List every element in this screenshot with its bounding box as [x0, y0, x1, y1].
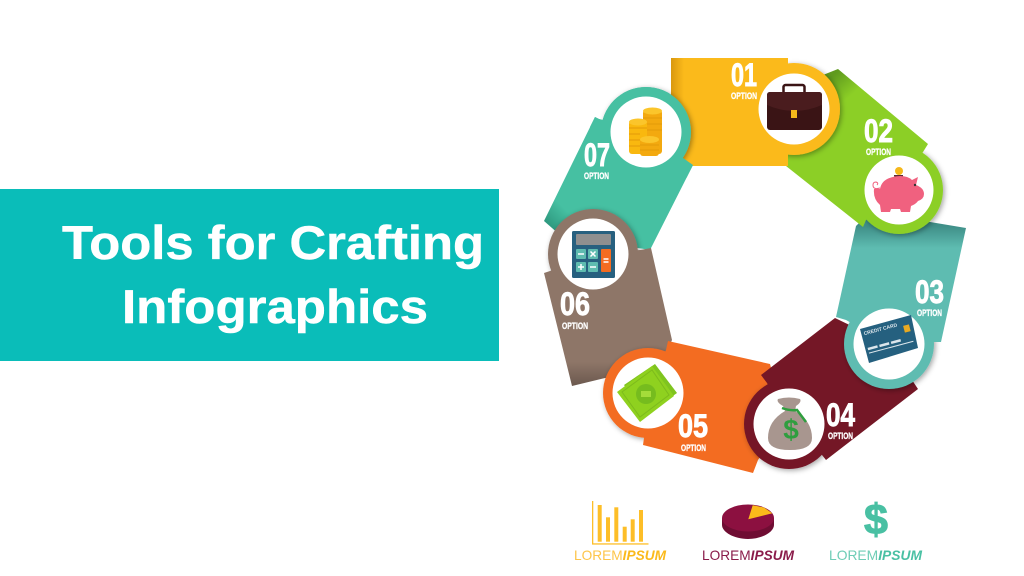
- panel 07 base shape: [544, 87, 693, 250]
- title text: Tools for Crafting: [62, 216, 484, 269]
- panel 05: banknotes: [603, 341, 785, 473]
- label 02: 02: [864, 113, 893, 149]
- panel 06: calculator: [544, 209, 672, 390]
- label 04: 04: [826, 397, 855, 433]
- logo text: LOREMIPSUM: [574, 547, 666, 563]
- label 05: 05: [678, 408, 708, 444]
- label 06: 06: [560, 286, 590, 322]
- label 01: OPTION: [731, 91, 757, 102]
- icon: calculator: [572, 231, 615, 278]
- label 06: [560, 286, 590, 332]
- icon: money bag: $: [783, 414, 799, 445]
- panel 03: credit card: [836, 212, 966, 389]
- label 03: 03: [915, 274, 944, 310]
- label 06: OPTION: [562, 321, 588, 332]
- logo text: LOREMIPSUM: [829, 547, 922, 563]
- dollar icon: $: [864, 496, 888, 544]
- label 01: 01: [731, 57, 757, 93]
- icon: piggy bank: [873, 167, 924, 212]
- icon: banknotes: [617, 364, 677, 422]
- icon: briefcase: [767, 85, 822, 130]
- label 04: OPTION: [828, 431, 853, 442]
- panel 02: piggy bank: [760, 69, 943, 234]
- title banner: [0, 189, 499, 361]
- logo: bar chart: [574, 501, 666, 563]
- label 02: [864, 113, 893, 158]
- icon: coins: [629, 108, 662, 156]
- panel 04: money bag: [744, 318, 918, 469]
- logo text: LOREMIPSUM: [702, 547, 794, 563]
- icon: money bag: [768, 398, 812, 450]
- panel 07: coins: [584, 85, 696, 180]
- label 07: [584, 137, 610, 182]
- label 02: OPTION: [866, 147, 891, 158]
- label 03: [915, 274, 944, 319]
- label 01: [731, 57, 757, 102]
- logo: pie chart: [702, 504, 794, 563]
- label 07: OPTION: [584, 171, 609, 182]
- panel 01: briefcase: [671, 57, 840, 166]
- label 04: [826, 397, 855, 442]
- bar chart icon: [592, 501, 648, 545]
- label 07: 07: [584, 137, 610, 173]
- pie chart icon: [722, 504, 774, 539]
- logo: dollar: [829, 496, 922, 563]
- label 03: OPTION: [917, 308, 942, 319]
- label 05: [678, 408, 708, 454]
- icon: credit card: [860, 315, 918, 363]
- label 05: OPTION: [681, 443, 706, 454]
- title banner: Infographics: [122, 280, 428, 333]
- icon: credit card: CREDIT CARD: [863, 322, 898, 337]
